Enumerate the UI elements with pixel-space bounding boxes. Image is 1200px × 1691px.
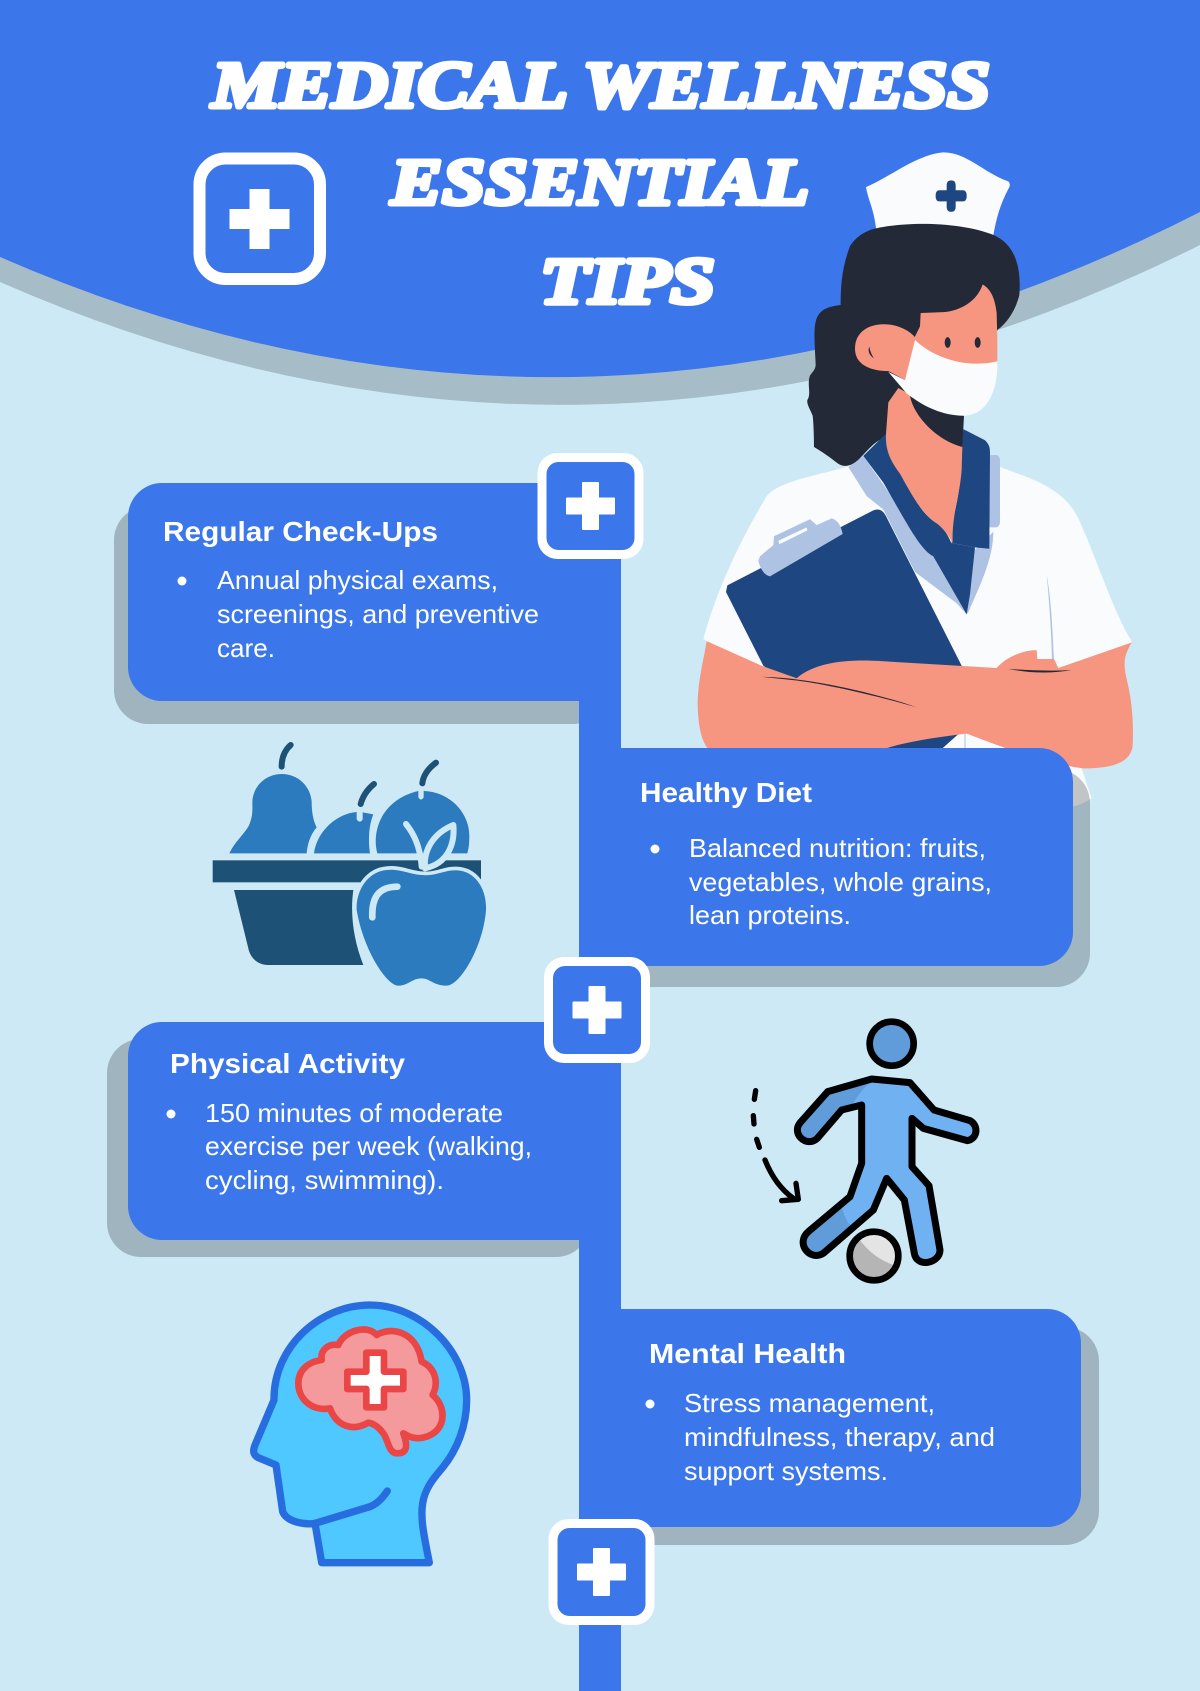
illustration: nurse	[698, 152, 1133, 807]
title: TIPS	[540, 245, 715, 318]
bullet text: mental health: mindfulness, therapy, and	[684, 1422, 995, 1452]
bullet text: healthy diet: lean proteins.	[689, 900, 851, 930]
bullet text: physical activity: exercise per week (walking,	[205, 1131, 532, 1161]
icon: fruit basket	[213, 745, 486, 986]
badge: plus 3	[548, 1519, 654, 1625]
panel: mental health	[579, 1309, 1081, 1527]
panel: regular check-ups	[128, 483, 621, 701]
bullet text: healthy diet: Balanced nutrition: fruits,	[689, 833, 986, 863]
heading: regular check-ups: Regular Check-Ups	[163, 516, 438, 547]
badge: plus 1	[538, 453, 644, 559]
panel: physical activity	[128, 1022, 621, 1240]
badge: plus 2	[544, 957, 650, 1063]
bullet text: physical activity: 150 minutes of moderate	[205, 1098, 503, 1128]
bullet text: healthy diet	[650, 833, 992, 930]
bullet text: physical activity: cycling, swimming).	[205, 1165, 444, 1195]
bullet text: physical activity	[166, 1098, 532, 1195]
timeline spine	[579, 600, 621, 1691]
panel shadow: healthy diet	[596, 769, 1090, 987]
heading: physical activity: Physical Activity	[170, 1048, 405, 1079]
icon: header medical plus	[200, 158, 320, 279]
bullet text: mental health: support systems.	[684, 1456, 888, 1486]
heading: healthy diet: Healthy Diet	[640, 777, 812, 808]
icon: person kicking ball	[753, 1022, 976, 1280]
icon: head with brain and cross	[254, 1305, 467, 1563]
bullet text: regular check-ups: screenings, and preventive	[217, 599, 539, 629]
bullet text: regular check-ups: care.	[217, 633, 275, 663]
header band shadow	[0, 0, 1200, 405]
panel shadow: regular check-ups	[114, 506, 607, 724]
title: MEDICAL WELLNESS	[211, 49, 990, 122]
bullet text: mental health: Stress management,	[684, 1388, 935, 1418]
panel shadow: physical activity	[107, 1039, 590, 1257]
bullet text: regular check-ups: Annual physical exams,	[217, 565, 498, 595]
panel: healthy diet	[579, 748, 1073, 966]
bullet text: regular check-ups	[178, 565, 539, 663]
bullet text: healthy diet: vegetables, whole grains,	[689, 867, 992, 897]
panel shadow: mental health	[597, 1327, 1099, 1545]
title: ESSENTIAL	[390, 146, 809, 219]
heading: mental health: Mental Health	[649, 1338, 846, 1369]
title	[211, 49, 990, 318]
bullet text: mental health	[646, 1388, 995, 1486]
header band	[0, 0, 1200, 377]
